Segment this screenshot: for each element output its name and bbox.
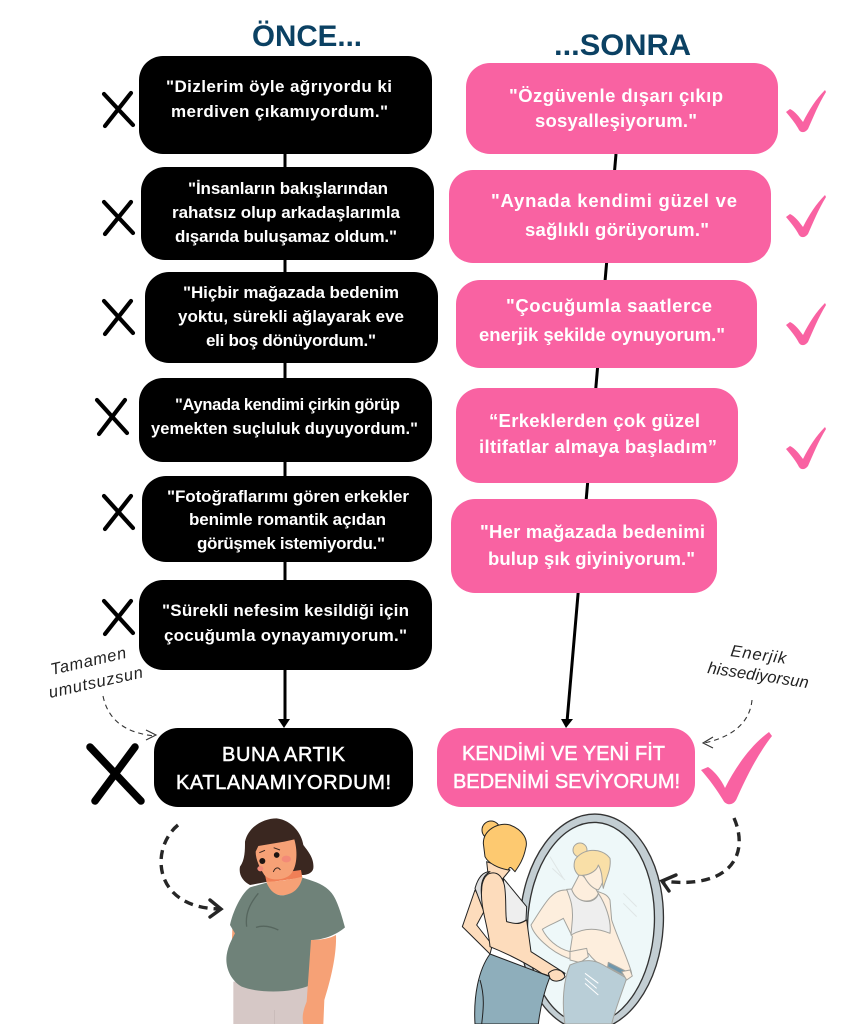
- icon: cross 1: [104, 93, 133, 126]
- panel: before item 3: eli boş dönüyordum.": [206, 331, 376, 350]
- panel: after item 3: "Çocuğumla saatlerce: [506, 295, 712, 316]
- panel: after item 3: [456, 280, 757, 368]
- panel: before item 1: "Dizlerim öyle ağrıyordu ki: [166, 77, 392, 96]
- icon: check 2: [786, 195, 826, 237]
- icon: cross 5: [104, 496, 133, 529]
- panel: after conclusion: KENDİMİ VE YENİ FİT: [462, 742, 665, 765]
- panel: after item 4: “Erkeklerden çok güzel: [489, 410, 700, 431]
- illustration: sad overweight woman: [226, 818, 345, 1024]
- panel: after item 2: sağlıklı görüyorum.": [525, 219, 709, 240]
- panel: before item 2: rahatsız olup arkadaşlarımla: [172, 203, 401, 222]
- panel: after item 5: "Her mağazada bedenimi: [480, 521, 705, 542]
- icon: cross 6: [104, 601, 133, 634]
- panel: before item 4: [139, 378, 432, 462]
- illustration: fit woman at mirror: [462, 810, 669, 1024]
- panel: after item 2: [449, 170, 771, 263]
- figure: [462, 821, 565, 1024]
- panel: after item 4: iltifatlar almaya başladım”: [479, 436, 717, 457]
- panel: after conclusion: [437, 728, 695, 807]
- heading: before: ÖNCE...: [252, 20, 362, 53]
- panel: before item 5: "Fotoğraflarımı gören erkekler: [167, 487, 409, 506]
- icon: check 4: [786, 427, 826, 469]
- icon: cross 2: [104, 202, 133, 234]
- icon: cross 4: [97, 400, 127, 434]
- panel: before item 6: "Sürekli nefesim kesildiği için: [162, 601, 409, 620]
- mirror: [514, 810, 669, 1024]
- panel: before item 5: benimle romantik açıdan: [189, 510, 386, 529]
- icon: cross 3: [104, 301, 133, 334]
- panel: after item 5: bulup şık giyiniyorum.": [488, 548, 695, 569]
- panel: after item 2: "Aynada kendimi güzel ve: [491, 190, 737, 211]
- arrow: dashed to left figure: [161, 825, 221, 917]
- icon: check 3: [786, 303, 826, 345]
- icon: large check: [701, 732, 772, 804]
- note: energetic: [706, 642, 810, 692]
- panel: before item 2: "İnsanların bakışlarından: [188, 179, 388, 198]
- panel: before conclusion: [154, 728, 413, 807]
- panel: after item 4: [456, 388, 738, 483]
- panel: after item 1: sosyalleşiyorum.": [535, 110, 697, 131]
- note: hopeless: umutsuzsun: [47, 664, 145, 702]
- panel: before item 1: merdiven çıkamıyordum.": [171, 102, 388, 121]
- panel: before item 5: görüşmek istemiyordu.": [197, 534, 385, 553]
- reflection: [531, 843, 632, 1024]
- note: energetic: hissediyorsun: [706, 659, 810, 692]
- panel: before item 6: çocuğumla oynayamıyorum.": [164, 626, 407, 645]
- right connector arrow: [561, 154, 616, 728]
- panel: after item 3: enerjik şekilde oynuyorum.": [479, 324, 725, 345]
- panel: before conclusion: BUNA ARTIK: [222, 744, 346, 766]
- panel: before item 3: [145, 272, 438, 363]
- panel: after conclusion: BEDENİMİ SEVİYORUM!: [453, 770, 680, 793]
- panel: before item 3: "Hiçbir mağazada bedenim: [183, 283, 399, 302]
- arrow: note to conclusion, right: [703, 700, 752, 748]
- panel: before item 2: [141, 167, 434, 260]
- icon: large cross: [90, 747, 141, 801]
- note: hopeless: [47, 644, 145, 702]
- panel: before item 3: yoktu, sürekli ağlayarak eve: [178, 307, 404, 326]
- panel: before item 4: "Aynada kendimi çirkin görüp: [175, 396, 400, 414]
- note: energetic: Enerjik: [729, 642, 788, 668]
- panel: before conclusion: KATLANAMIYORDUM!: [176, 772, 391, 794]
- note: hopeless: Tamamen: [49, 644, 128, 679]
- panel: before item 5: [142, 476, 432, 562]
- arrow: dashed to mirror: [662, 818, 739, 891]
- icon: check 1: [786, 90, 826, 132]
- panel: before item 1: [139, 56, 432, 154]
- left connector arrow: [278, 56, 290, 728]
- panel: before item 2: dışarıda buluşamaz oldum.": [175, 227, 397, 246]
- panel: after item 1: [466, 63, 778, 154]
- panel: before item 4: yemekten suçluluk duyuyordum.": [151, 420, 418, 438]
- panel: after item 1: "Özgüvenle dışarı çıkıp: [509, 85, 723, 106]
- heading: after: ...SONRA: [554, 29, 691, 62]
- panel: after item 5: [451, 499, 717, 593]
- arrow: note to conclusion, left: [103, 696, 156, 740]
- panel: before item 6: [139, 580, 432, 670]
